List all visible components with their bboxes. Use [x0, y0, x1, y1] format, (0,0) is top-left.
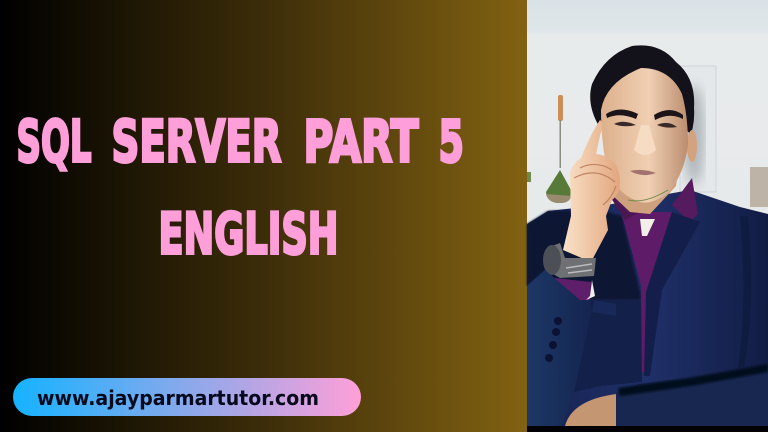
hair	[590, 45, 694, 134]
gradient background panel	[0, 0, 527, 432]
right lapel	[644, 212, 700, 376]
bottom black strip	[527, 426, 768, 432]
shirt	[611, 178, 698, 372]
dark inner jacket area	[527, 210, 641, 300]
wristwatch	[543, 243, 596, 278]
website pill	[13, 378, 361, 416]
photo: presenter thinking	[527, 0, 768, 432]
ear	[687, 130, 697, 162]
website pill: www.ajayparmartutor.com	[37, 386, 319, 410]
shirt cuff	[555, 278, 591, 300]
title: PART	[304, 108, 419, 176]
title	[16, 108, 464, 268]
sleeve buttons	[545, 317, 562, 362]
hand at temple	[563, 120, 620, 262]
title: SERVER	[112, 108, 282, 176]
wall door frame	[680, 66, 716, 192]
photo background wall	[527, 0, 768, 432]
title: SQL	[16, 108, 92, 176]
suit jacket torso	[527, 190, 768, 426]
facial features	[606, 110, 683, 201]
finger creases	[574, 164, 616, 205]
box on the right	[750, 167, 768, 207]
face	[601, 68, 688, 203]
pocket flap	[592, 300, 616, 316]
sleeve	[527, 270, 592, 426]
hanging plant decoration	[527, 95, 571, 203]
title: 5	[438, 108, 464, 176]
folded arm crease	[618, 364, 768, 396]
folded forearm	[616, 368, 768, 426]
title: ENGLISH	[158, 202, 338, 268]
neck	[612, 160, 680, 214]
lower hand	[565, 394, 616, 426]
left jacket panel	[574, 300, 642, 392]
